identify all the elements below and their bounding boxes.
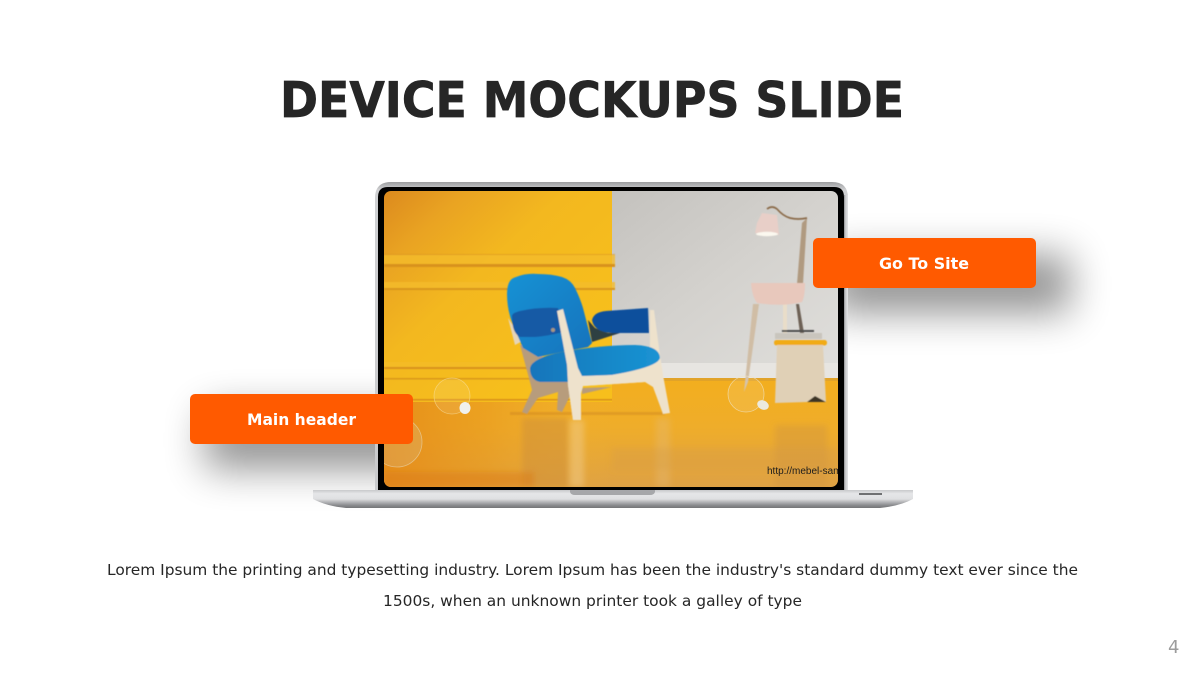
lamp table and stool	[744, 207, 827, 403]
stool top	[774, 340, 827, 346]
side table legs	[744, 304, 759, 392]
shadow: main header button	[205, 411, 445, 469]
chair armrest button	[551, 328, 555, 332]
laptop right edge	[844, 195, 848, 490]
chair frame	[567, 310, 670, 420]
side table bowl	[751, 283, 805, 305]
button: main header: Main header	[247, 410, 356, 429]
base slot	[859, 493, 882, 495]
glass bulb right	[728, 376, 770, 412]
lamp shade	[755, 213, 779, 235]
glass bulb left	[434, 378, 470, 414]
chair seat	[530, 345, 660, 382]
floor	[384, 378, 838, 487]
glass bulb under label	[384, 422, 422, 468]
lamp arm	[767, 207, 807, 219]
chair front post	[556, 308, 644, 419]
laptop black bezel	[378, 187, 844, 490]
grey wall	[612, 191, 838, 366]
chair back wood leg	[520, 345, 612, 414]
chair shadow on floor	[510, 412, 665, 415]
yellow wall	[384, 191, 612, 403]
laptop mockup	[313, 182, 913, 508]
laptop base	[313, 490, 913, 508]
title: DEVICE MOCKUPS SLIDE	[280, 72, 904, 129]
chair	[507, 274, 670, 420]
books	[782, 330, 814, 332]
chair left wood support	[508, 318, 522, 346]
skirting board	[660, 363, 838, 378]
button: main header	[190, 394, 413, 444]
body text	[107, 561, 1078, 610]
chair right armrest	[592, 308, 649, 333]
shadow: go to site button	[830, 255, 1070, 313]
screen photo: yellow room with blue chair	[372, 191, 841, 487]
watermark url: http://mebel-sam	[767, 466, 841, 477]
body text: Lorem Ipsum the printing and typesetting industry. Lorem Ipsum has been the industry's standard dummy text ever since the	[107, 561, 1078, 579]
floor reflections	[384, 418, 838, 487]
wall mouldings	[384, 254, 615, 400]
stool body	[775, 345, 826, 403]
page number: 4	[1168, 637, 1179, 658]
trackpad notch	[570, 490, 655, 495]
chair backrest	[507, 274, 592, 357]
chair left armrest	[512, 308, 563, 337]
laptop lid frame	[375, 182, 848, 490]
chair dark strap	[588, 320, 620, 342]
lamp pole	[797, 218, 807, 284]
body text: 1500s, when an unknown printer took a galley of type	[383, 592, 802, 610]
button: go to site	[813, 238, 1036, 288]
button: go to site: Go To Site	[879, 254, 969, 273]
